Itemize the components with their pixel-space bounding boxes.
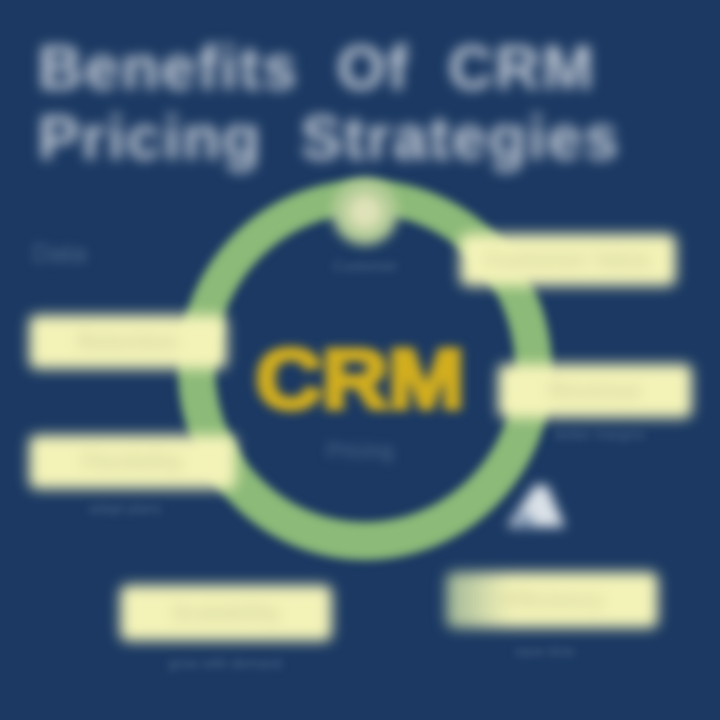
caption under bottom left box: grow with demand xyxy=(168,655,282,671)
box: right middle: Revenue xyxy=(549,378,641,403)
box: left lower: Flexibility xyxy=(82,449,183,474)
box: bottom right: Efficiency xyxy=(500,587,604,612)
box: top right xyxy=(460,234,676,286)
icon: small white chart xyxy=(502,476,572,536)
title: Benefits Of CRM xyxy=(38,34,596,103)
title xyxy=(32,34,624,181)
center sublabel: Pricing xyxy=(326,438,394,463)
box: right middle xyxy=(498,364,692,418)
box: bottom right xyxy=(446,572,658,628)
box: bottom left xyxy=(120,585,332,641)
title: Pricing Strategies xyxy=(38,104,620,173)
box: bottom left: Scalability xyxy=(172,600,280,625)
box: left upper xyxy=(29,315,227,369)
box: top right: Customer Value xyxy=(485,247,651,272)
box: left lower xyxy=(29,435,236,489)
icon: top circle xyxy=(325,170,405,254)
label under top circle: Customer xyxy=(332,258,398,275)
center text: CRM: CRM xyxy=(256,332,464,426)
box: left upper: Retention xyxy=(77,329,179,354)
caption under right middle box: better margins xyxy=(555,426,645,442)
side label left: Data xyxy=(32,238,87,268)
caption under left lower box: adapt plans xyxy=(89,500,161,516)
caption under bottom right box: save time xyxy=(515,643,575,659)
